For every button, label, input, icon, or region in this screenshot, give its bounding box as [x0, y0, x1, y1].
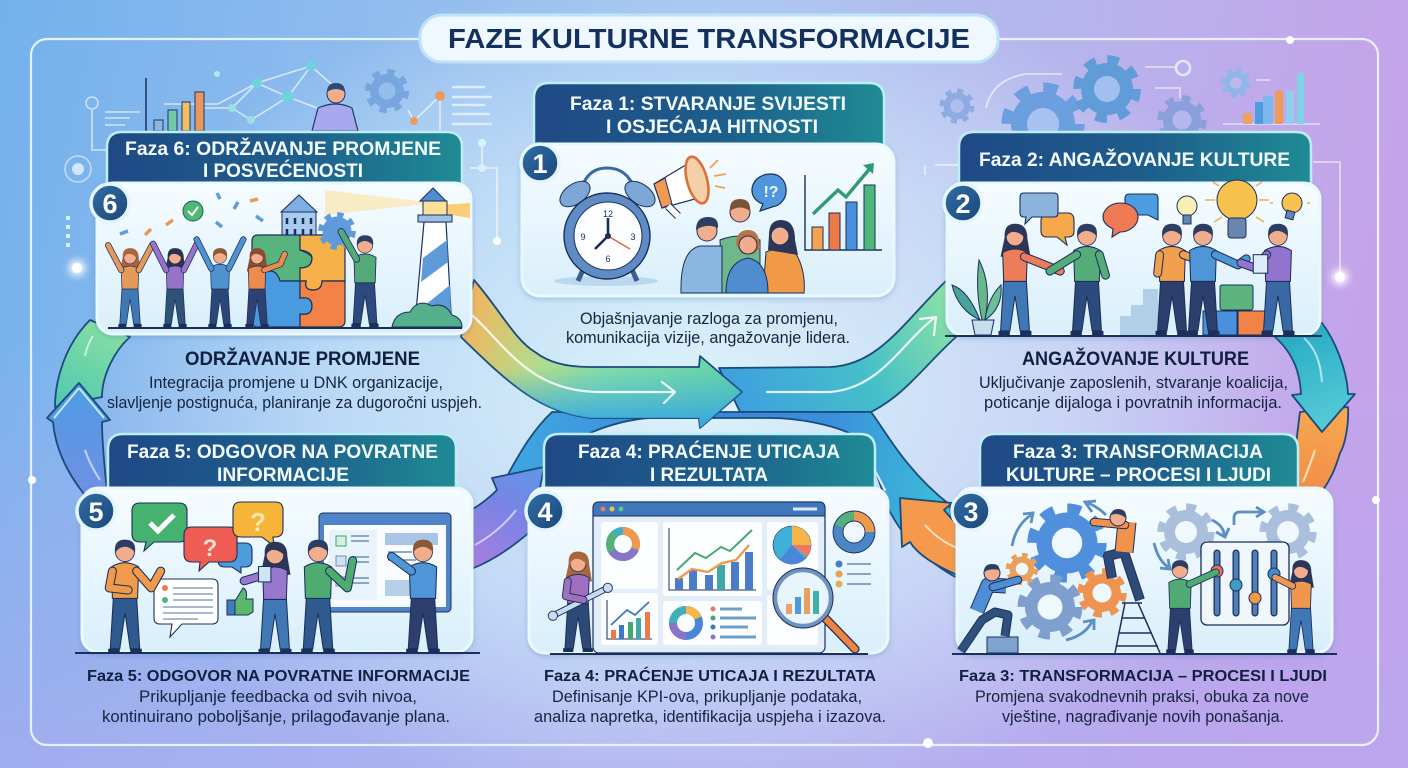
small bar chart — [607, 600, 652, 639]
arrow: faza 3 to faza 4 — [900, 498, 957, 575]
gears — [1008, 508, 1312, 634]
text: faza 4 description: Definisanje KPI-ova, prikupljanje podataka, — [552, 688, 862, 706]
heading: faza 3 — [980, 434, 1298, 495]
text: faza 3 description — [959, 668, 1327, 726]
arrow: faza 2 to faza 3 — [1275, 323, 1355, 490]
legend rows — [710, 606, 756, 640]
badge 6: 6 — [102, 189, 118, 219]
megaphone — [654, 154, 726, 216]
outer donut — [833, 511, 875, 553]
text: faza 1 description — [566, 310, 850, 347]
text: faza 2 description — [979, 348, 1288, 412]
check mark — [183, 201, 203, 221]
text: faza 2 description: ANGAŽOVANJE KULTURE — [1022, 348, 1249, 370]
pie chart — [773, 526, 811, 564]
people — [108, 540, 161, 653]
badge 2 — [944, 184, 982, 222]
text: faza 5 description: Faza 5: ODGOVOR NA POVRATNE INFORMACIJE — [87, 668, 470, 685]
arrow: center to faza 2 — [719, 277, 956, 412]
arrow: faza 5 to faza 4 — [471, 467, 544, 569]
decoration: top left network — [65, 61, 501, 276]
heading: faza 4: Faza 4: PRAĆENJE UTICAJA — [578, 441, 840, 463]
confetti — [120, 193, 263, 235]
light bulbs — [1177, 180, 1310, 238]
alarm clock: 6 — [605, 254, 611, 264]
badge 3: 3 — [963, 497, 979, 527]
person at sliders — [1166, 560, 1216, 653]
text: faza 5 description: Prikupljanje feedbacka od svih nivoa, — [139, 688, 417, 706]
panel: faza 1 — [521, 83, 894, 347]
title: FAZE KULTURNE TRANSFORMACIJE — [448, 23, 970, 54]
speech bubbles — [132, 502, 283, 637]
group of people — [681, 199, 804, 293]
heading: faza 2: Faza 2: ANGAŽOVANJE KULTURE — [979, 149, 1290, 171]
panel: faza 2 — [944, 132, 1322, 412]
magnifying glass — [773, 568, 855, 649]
badge 5 — [77, 492, 115, 530]
comment lines — [162, 585, 213, 619]
card: faza 4 illustration — [529, 488, 888, 654]
person climbing — [1094, 509, 1140, 600]
arrow: faza 6 to center flow — [461, 280, 742, 428]
heading: faza 6 — [107, 132, 462, 190]
heading: faza 4 — [544, 434, 875, 495]
badge 6 — [91, 184, 129, 222]
speech bubbles — [1020, 193, 1158, 245]
blocks — [1203, 285, 1268, 335]
line and bar chart — [669, 528, 756, 590]
heading: faza 6: Faza 6: ODRŽAVANJE PROMJENE — [125, 138, 441, 160]
gear held — [321, 215, 353, 247]
text: faza 1 description: Objašnjavanje razloga za promjenu, — [580, 310, 838, 328]
panel: faza 5 — [75, 434, 480, 726]
bar chart — [805, 163, 882, 250]
text: faza 6 description — [107, 348, 482, 412]
heading: faza 5: Faza 5: ODGOVOR NA POVRATNE — [127, 442, 438, 463]
control panel sliders — [1201, 542, 1289, 625]
alarm clock: 9 — [580, 232, 586, 242]
check mark and question marks: ? — [203, 535, 217, 562]
card: faza 2 illustration — [945, 180, 1322, 336]
panel: faza 6 — [91, 132, 482, 412]
card: faza 6 illustration — [97, 183, 471, 334]
alarm clock — [554, 168, 660, 286]
plant — [952, 260, 1001, 335]
arrow: faza 5 to faza 6 — [47, 320, 130, 494]
donut chart a — [610, 531, 636, 557]
box — [987, 637, 1018, 653]
badge 3 — [952, 492, 990, 530]
text: faza 6 description: Integracija promjene u DNK organizacije, — [149, 374, 443, 392]
dashboard window — [593, 502, 825, 653]
check mark and question marks — [150, 507, 266, 562]
heading: faza 3: KULTURE – PROCESI I LJUDI — [1006, 465, 1271, 486]
alarm clock: 12 — [603, 209, 613, 219]
panel: faza 4 — [526, 434, 888, 726]
speech bubble !? — [752, 174, 786, 211]
text: faza 3 description: Faza 3: TRANSFORMACIJA – PROCESI I LJUDI — [959, 668, 1327, 685]
heading: faza 6: I POSVEĆENOSTI — [203, 160, 363, 182]
heading: faza 1: Faza 1: STVARANJE SVIJESTI — [570, 94, 846, 115]
heading: faza 2 — [959, 132, 1311, 190]
outer legend — [836, 560, 871, 588]
puzzle — [252, 235, 345, 327]
badge 4 — [526, 492, 564, 530]
building — [281, 195, 317, 238]
text: faza 5 description — [87, 668, 470, 726]
person with wrench — [548, 552, 612, 652]
person pushing gear — [961, 564, 1018, 651]
lighthouse — [325, 188, 470, 327]
card: faza 5 illustration — [75, 488, 480, 653]
badge 1: 1 — [532, 149, 548, 179]
heading: faza 1 — [534, 83, 884, 150]
heading: faza 3: Faza 3: TRANSFORMACIJA — [1013, 442, 1263, 463]
donut chart b — [673, 610, 699, 636]
feedback board — [319, 513, 451, 612]
thumbs up — [227, 588, 253, 615]
text: faza 3 description: Promjena svakodnevnih praksi, obuka za nove — [975, 688, 1309, 706]
heading: faza 4: I REZULTATA — [650, 465, 768, 486]
badge 5: 5 — [88, 497, 104, 527]
woman at sliders — [1275, 560, 1315, 653]
text: faza 1 description: komunikacija vizije, angažovanje lidera. — [566, 329, 850, 347]
rotation arrows — [1012, 501, 1264, 640]
badge 1 — [521, 144, 559, 182]
people celebrating — [108, 245, 152, 327]
text: faza 3 description: vještine, nagrađivanje novih ponašanja. — [1002, 708, 1284, 726]
ladder — [1115, 603, 1160, 653]
heading: faza 5 — [108, 434, 456, 495]
alarm clock: 3 — [630, 232, 636, 242]
badge 2: 2 — [955, 189, 971, 219]
text: faza 4 description — [534, 666, 886, 726]
text: faza 2 description: Uključivanje zaposlenih, stvaranje koalicija, — [979, 374, 1288, 392]
text: faza 4 description: Faza 4: PRAĆENJE UTICAJA I REZULTATA — [544, 666, 876, 685]
title — [420, 15, 998, 62]
text: faza 5 description: kontinuirano poboljšanje, prilagođavanje plana. — [102, 708, 450, 726]
heading: faza 1: I OSJEĆAJA HITNOSTI — [606, 116, 818, 138]
text: faza 6 description: slavljenje postignuća, planiranje za dugoročni uspjeh. — [107, 394, 482, 412]
text: faza 4 description: analiza napretka, identifikacija uspjeha i izazova. — [534, 708, 886, 726]
card: faza 1 illustration — [522, 144, 894, 296]
text: faza 6 description: ODRŽAVANJE PROMJENE — [185, 348, 420, 370]
card: faza 3 illustration — [952, 488, 1337, 654]
badge 4: 4 — [537, 497, 553, 527]
text: faza 2 description: poticanje dijaloga i povratnih informacija. — [984, 394, 1282, 412]
heading: faza 5: INFORMACIJE — [217, 465, 349, 486]
stairs — [1120, 289, 1158, 335]
panel: faza 3 — [952, 434, 1337, 726]
speech bubble !?: !? — [763, 184, 779, 201]
people — [999, 224, 1060, 335]
check mark and question marks: ? — [250, 507, 266, 537]
arrow: blue arch from faza 5 to faza 3 — [505, 412, 957, 578]
decoration: top right gears — [925, 60, 1348, 285]
